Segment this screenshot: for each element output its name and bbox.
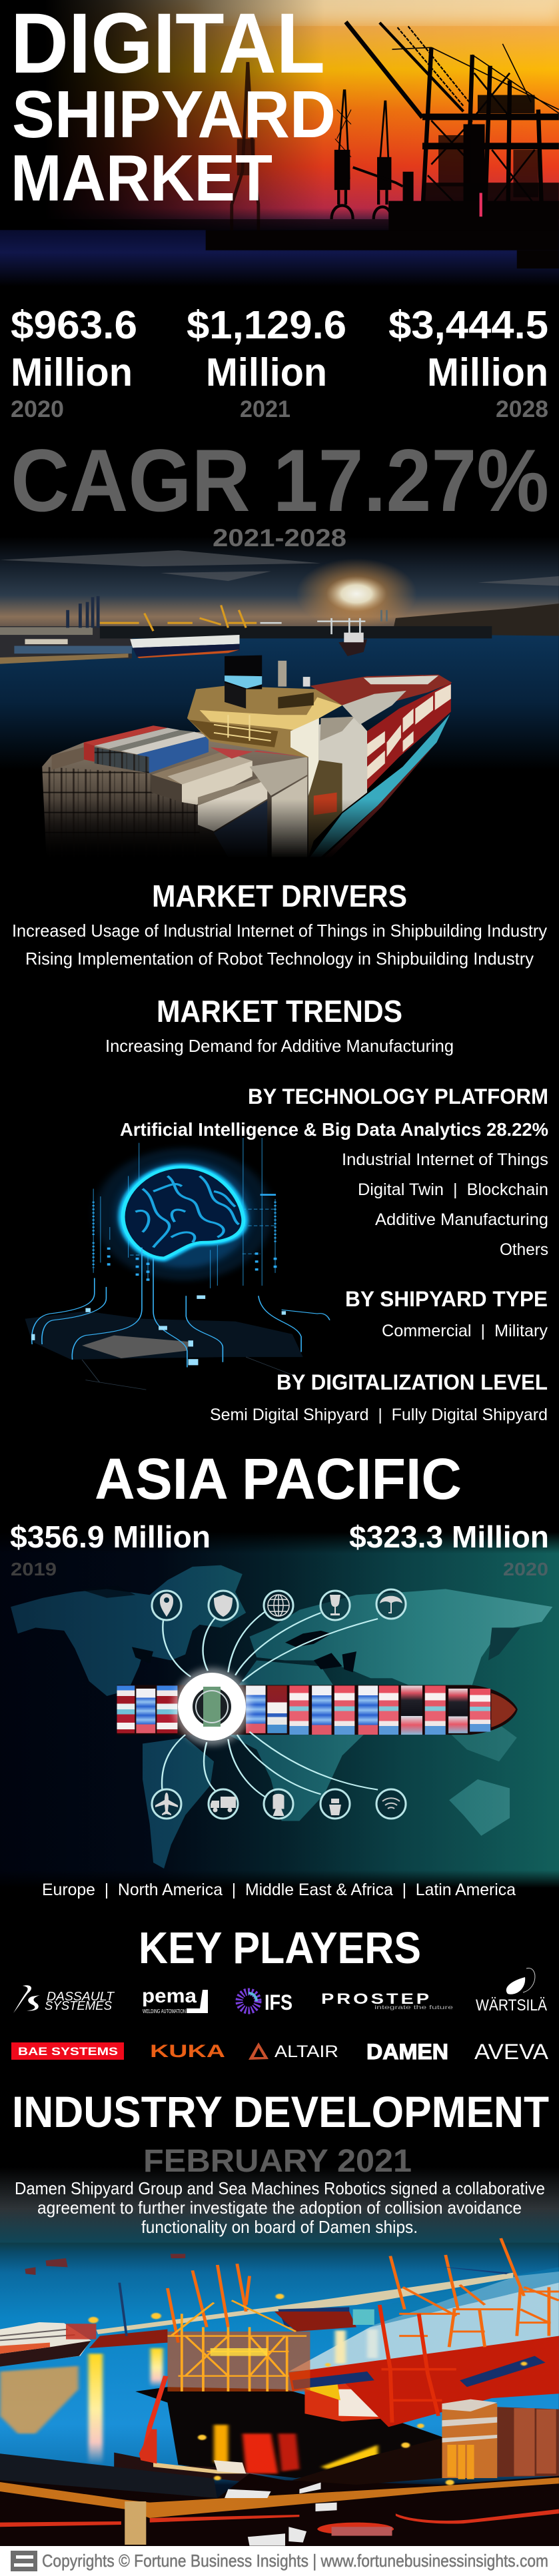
logo: Prostep	[321, 1990, 454, 2010]
segments: technology platform: Industrial Internet of Things	[342, 1150, 548, 1169]
stat: 2021: Million	[206, 350, 327, 394]
stat: 2020: $963.6	[11, 303, 137, 347]
icon: location pin	[160, 1593, 173, 1617]
distant ships	[25, 2254, 185, 2275]
stat: 2028: Million	[427, 350, 548, 394]
footer	[0, 2546, 559, 2576]
driver text: Increased Usage of Industrial Internet of Things in Shipbuilding Industry	[12, 921, 547, 941]
walkway	[0, 2477, 559, 2518]
world map	[11, 1565, 552, 1869]
logo: Aveva: AVEVA	[474, 2040, 549, 2064]
stat: 2020: 2020	[11, 396, 64, 422]
foreground wall	[0, 2453, 217, 2500]
segments: shipyard type: BY SHIPYARD TYPE	[345, 1287, 548, 1311]
heading: key players: KEY PLAYERS	[139, 1923, 421, 1973]
title	[11, 0, 336, 215]
heading: market trends: MARKET TRENDS	[157, 994, 402, 1029]
title: SHIPYARD	[12, 77, 336, 152]
market size figures	[11, 303, 548, 422]
logo: Dassault Systemes: SYSTEMES	[45, 1999, 112, 2012]
segments: digitalization level: BY DIGITALIZATION LEVEL	[277, 1370, 548, 1394]
panel: hero sunset port	[0, 0, 559, 286]
hub circle	[173, 1668, 251, 1745]
development text	[12, 2087, 549, 2237]
dark quay and ship	[135, 2387, 446, 2478]
forward containers	[319, 717, 367, 812]
heading: market trends	[105, 994, 454, 1056]
driver text	[12, 921, 547, 969]
heading: market drivers	[12, 879, 547, 969]
stat: 2028: $3,444.5	[388, 303, 548, 347]
panel: harbour photo at night	[0, 2167, 559, 2546]
heading: Asia Pacific: ASIA PACIFIC	[95, 1447, 462, 1511]
segments: technology platform: BY TECHNOLOGY PLATFORM	[248, 1084, 548, 1108]
segments: technology platform: Digital Twin | Blockchain	[358, 1180, 548, 1199]
segments: shipyard type: Commercial | Military	[382, 1322, 548, 1340]
title: MARKET	[11, 141, 273, 215]
stat: 2021: 2021	[240, 396, 290, 422]
segments: digitalization level: Semi Digital Shipyard | Fully Digital Shipyard	[210, 1406, 548, 1424]
development text: FEBRUARY 2021	[143, 2144, 412, 2179]
stat: 2019: 2019	[11, 1559, 57, 1579]
crane silhouettes	[0, 22, 559, 268]
brain	[123, 1167, 243, 1258]
icon: umbrella	[380, 1596, 402, 1613]
panel: world map with container ship	[0, 1532, 559, 1888]
stat: 2020: $323.3 Million	[349, 1519, 549, 1554]
logo: Altair: ALTAIR	[275, 2042, 338, 2061]
gantry cranes	[167, 2238, 559, 2423]
development paragraph	[15, 2178, 545, 2237]
data columns	[93, 1138, 276, 1288]
heading: market drivers: MARKET DRIVERS	[152, 879, 407, 913]
icon: wifi	[382, 1798, 400, 1809]
logo: Altair	[249, 2042, 338, 2061]
logo: KUKA: KUKA	[150, 2041, 225, 2061]
other regions: Europe | North America | Middle East & Africa | Latin America	[42, 1881, 516, 1899]
logo: Dassault Systemes	[13, 1985, 115, 2013]
segments: shipyard type	[345, 1287, 548, 1340]
icon ring row: top	[152, 1589, 406, 1620]
breakwater	[96, 2273, 513, 2334]
segments: technology platform: Others	[500, 1240, 548, 1259]
stat: 2020: Million	[11, 350, 133, 394]
logo: Wartsila	[476, 1968, 547, 2014]
logo: Damen: DAMEN	[366, 2040, 448, 2064]
logo: Prostep: integrate the future	[374, 2004, 454, 2010]
logo: Dassault Systemes: DASSAULT	[47, 1990, 115, 2003]
segments: digitalization level	[210, 1370, 548, 1424]
driver text: Rising Implementation of Robot Technology in Shipbuilding Industry	[25, 949, 534, 969]
icon: truck	[211, 1797, 236, 1812]
icon: Fortune Business Insights logo	[11, 2551, 37, 2571]
icon: plane	[155, 1793, 178, 1815]
stat: 2021: $1,129.6	[187, 303, 346, 347]
stat: 2021	[187, 303, 346, 422]
stat: 2028: 2028	[496, 396, 548, 422]
logo: Prostep: PROSTEP	[321, 1990, 432, 2007]
ship top view	[117, 1685, 518, 1735]
segments: technology platform: Artificial Intelligence & Big Data Analytics 28.22%	[120, 1119, 548, 1140]
connector curves	[162, 1611, 378, 1797]
icon: AI brain on circuit board	[25, 1138, 330, 1390]
silo	[442, 2401, 497, 2478]
icon: shield	[214, 1595, 233, 1617]
segments: technology platform: Additive Manufacturing	[375, 1210, 548, 1229]
logo: IFS	[239, 1990, 292, 2014]
reflections	[0, 2330, 378, 2465]
stat: 2019	[10, 1519, 211, 1579]
cruise ship	[0, 2322, 91, 2367]
icon: ship	[329, 1799, 341, 1815]
icon: fragile glass	[330, 1595, 340, 1615]
cargo ship	[42, 655, 452, 857]
development paragraph: functionality on board of Damen ships.	[141, 2217, 418, 2237]
logo: Pema	[142, 1985, 208, 2014]
circuit board	[25, 1248, 330, 1390]
logo: BAE Systems: BAE SYSTEMS	[18, 2045, 118, 2058]
CAGR: 2021-2028	[213, 524, 346, 552]
harbour shoreline	[0, 596, 559, 664]
container yard	[288, 2336, 559, 2427]
panel: container ship photo	[0, 537, 559, 863]
development paragraph: agreement to further investigate the adoption of collision avoidance	[37, 2198, 522, 2218]
lifeboat	[308, 760, 342, 857]
icon: train	[273, 1794, 284, 1816]
car carrier	[130, 633, 367, 658]
logo: Wartsila: WÄRTSILÄ	[476, 1996, 547, 2014]
stat: 2020	[11, 303, 137, 422]
heading: market trends: Increasing Demand for Additive Manufacturing	[105, 1036, 454, 1056]
stat: 2028	[388, 303, 548, 422]
icon: globe	[268, 1595, 289, 1616]
logo: Pema: WELDING AUTOMATION	[143, 2008, 186, 2014]
pale water right	[288, 2272, 559, 2371]
panel: company logos	[11, 1968, 549, 2064]
hull	[310, 714, 450, 857]
icon ring row: bottom	[152, 1789, 406, 1819]
superstructure	[187, 686, 342, 757]
segments: technology platform	[120, 1084, 548, 1259]
stat: 2020	[349, 1519, 549, 1579]
stat: 2020: 2020	[503, 1559, 548, 1579]
logo: BAE Systems	[11, 2042, 124, 2060]
heading: Asia Pacific	[10, 1447, 549, 1579]
logo: Pema: pema	[142, 1985, 197, 2007]
stat: 2019: $356.9 Million	[10, 1519, 211, 1554]
logo: IFS: IFS	[265, 1990, 292, 2014]
